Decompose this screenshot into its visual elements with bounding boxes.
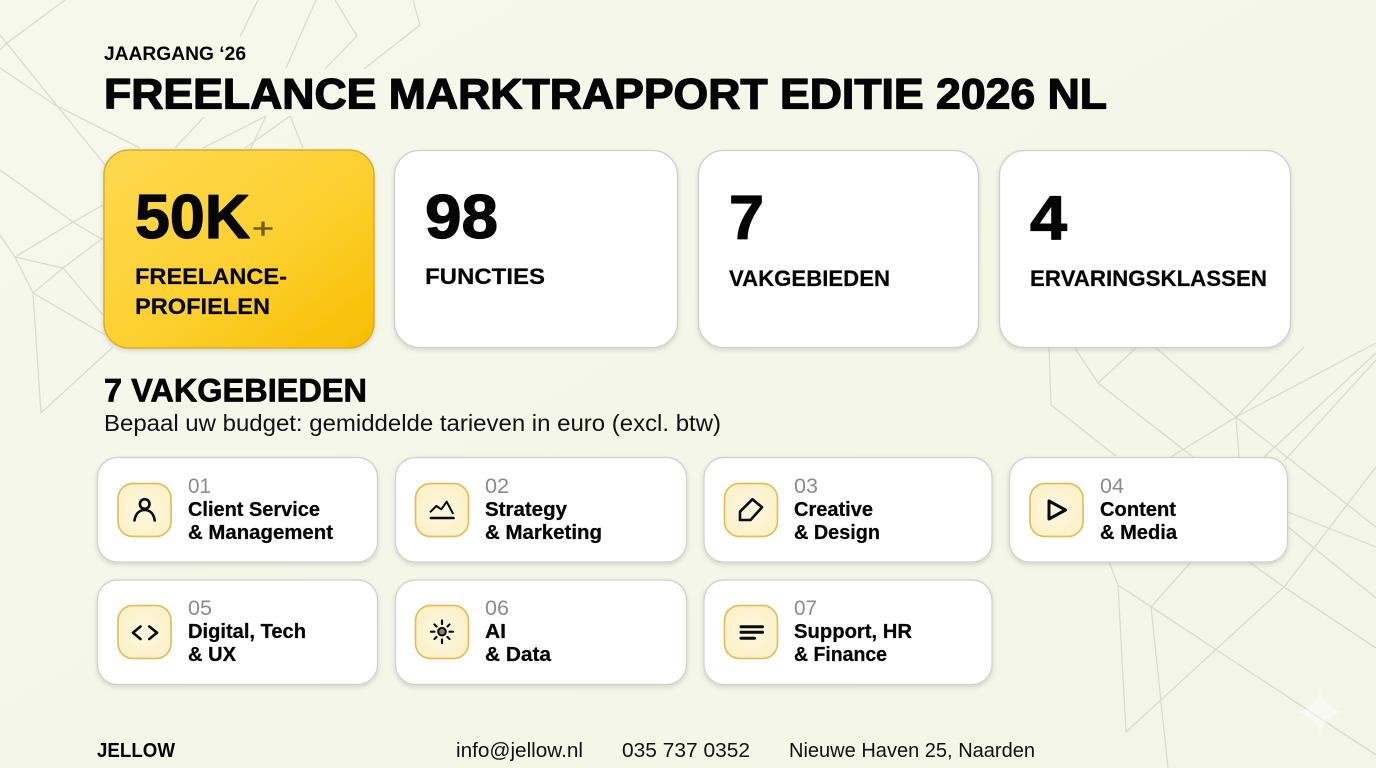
- footer phone: 035 737 0352: [622, 740, 750, 762]
- category text: [188, 597, 306, 666]
- category card 06: [396, 580, 686, 684]
- icon: text lines: [724, 606, 778, 658]
- category card 05: [98, 580, 378, 684]
- icon: mountain chart: [416, 484, 468, 536]
- title: FREELANCE MARKTRAPPORT EDITIE 2026 NL: [104, 70, 1107, 118]
- category text: 07: [794, 597, 817, 620]
- stat value: 50K+: 50K: [135, 183, 250, 252]
- category text: [794, 475, 880, 544]
- stat value: 4: 4: [1030, 184, 1068, 253]
- section subheading: Bepaal uw budget: gemiddelde tarieven in euro (excl. btw): [104, 410, 721, 436]
- category text: Client Service: [188, 499, 320, 521]
- stat label: ervaringsklassen: ERVARINGSKLASSEN: [1030, 266, 1267, 291]
- stat card: 50K+ freelance-profielen: [104, 150, 374, 348]
- category card 02: [396, 458, 686, 562]
- category text: 02: [485, 475, 509, 498]
- category text: AI: [485, 621, 506, 643]
- category text: Strategy: [485, 499, 568, 521]
- category text: [794, 597, 913, 666]
- category text: & UX: [188, 644, 237, 666]
- kicker: jaargang: JAARGANG ‘26: [104, 44, 246, 65]
- stat value: 7: 7: [729, 184, 764, 253]
- stat card: 4 ervaringsklassen: [1000, 150, 1290, 348]
- category text: 04: [1100, 475, 1124, 498]
- category text: Content: [1100, 499, 1176, 521]
- icon: code brackets: [118, 606, 171, 658]
- category text: & Media: [1100, 522, 1178, 544]
- stat label: freelance-profielen: FREELANCE-: [135, 264, 287, 289]
- stat card: 7 vakgebieden: [698, 150, 978, 348]
- icon: pencil: [724, 484, 778, 536]
- stat value: 50K+: +: [252, 213, 274, 244]
- category text: & Design: [794, 522, 880, 544]
- footer address: Nieuwe Haven 25, Naarden: [789, 740, 1035, 762]
- icon: play: [1030, 484, 1083, 536]
- stat label: freelance-profielen: PROFIELEN: [135, 294, 270, 319]
- category text: & Data: [485, 644, 552, 666]
- footer email: info@jellow.nl: [456, 740, 583, 762]
- footer brand: JELLOW: [97, 740, 175, 762]
- category text: [485, 597, 552, 666]
- category text: Digital, Tech: [188, 621, 306, 643]
- category text: Creative: [794, 499, 873, 521]
- stat label: freelance-profielen: [135, 264, 287, 319]
- category text: [1100, 475, 1178, 544]
- category card 07: [704, 580, 992, 684]
- category text: Support, HR: [794, 621, 913, 643]
- section heading: 7 VAKGEBIEDEN: [104, 372, 367, 408]
- category card 03: [704, 458, 992, 562]
- category text: 06: [485, 597, 509, 620]
- category text: 01: [188, 475, 211, 498]
- category text: & Management: [188, 522, 333, 544]
- icon: sun / data: [416, 606, 468, 658]
- category text: [188, 475, 333, 544]
- category card 04: [1010, 458, 1288, 562]
- icon: person: [118, 484, 171, 536]
- category text: [485, 475, 602, 544]
- icon: sparkle watermark: [1296, 688, 1344, 736]
- stat value: 98: 98: [425, 183, 498, 252]
- category text: 05: [188, 597, 212, 620]
- stat label: vakgebieden: VAKGEBIEDEN: [729, 266, 890, 291]
- category text: & Finance: [794, 644, 887, 666]
- category text: & Marketing: [485, 522, 602, 544]
- category card 01: [98, 458, 378, 562]
- stat label: functies: FUNCTIES: [425, 264, 545, 289]
- category text: 03: [794, 475, 818, 498]
- stat card: 98 functies: [394, 150, 678, 348]
